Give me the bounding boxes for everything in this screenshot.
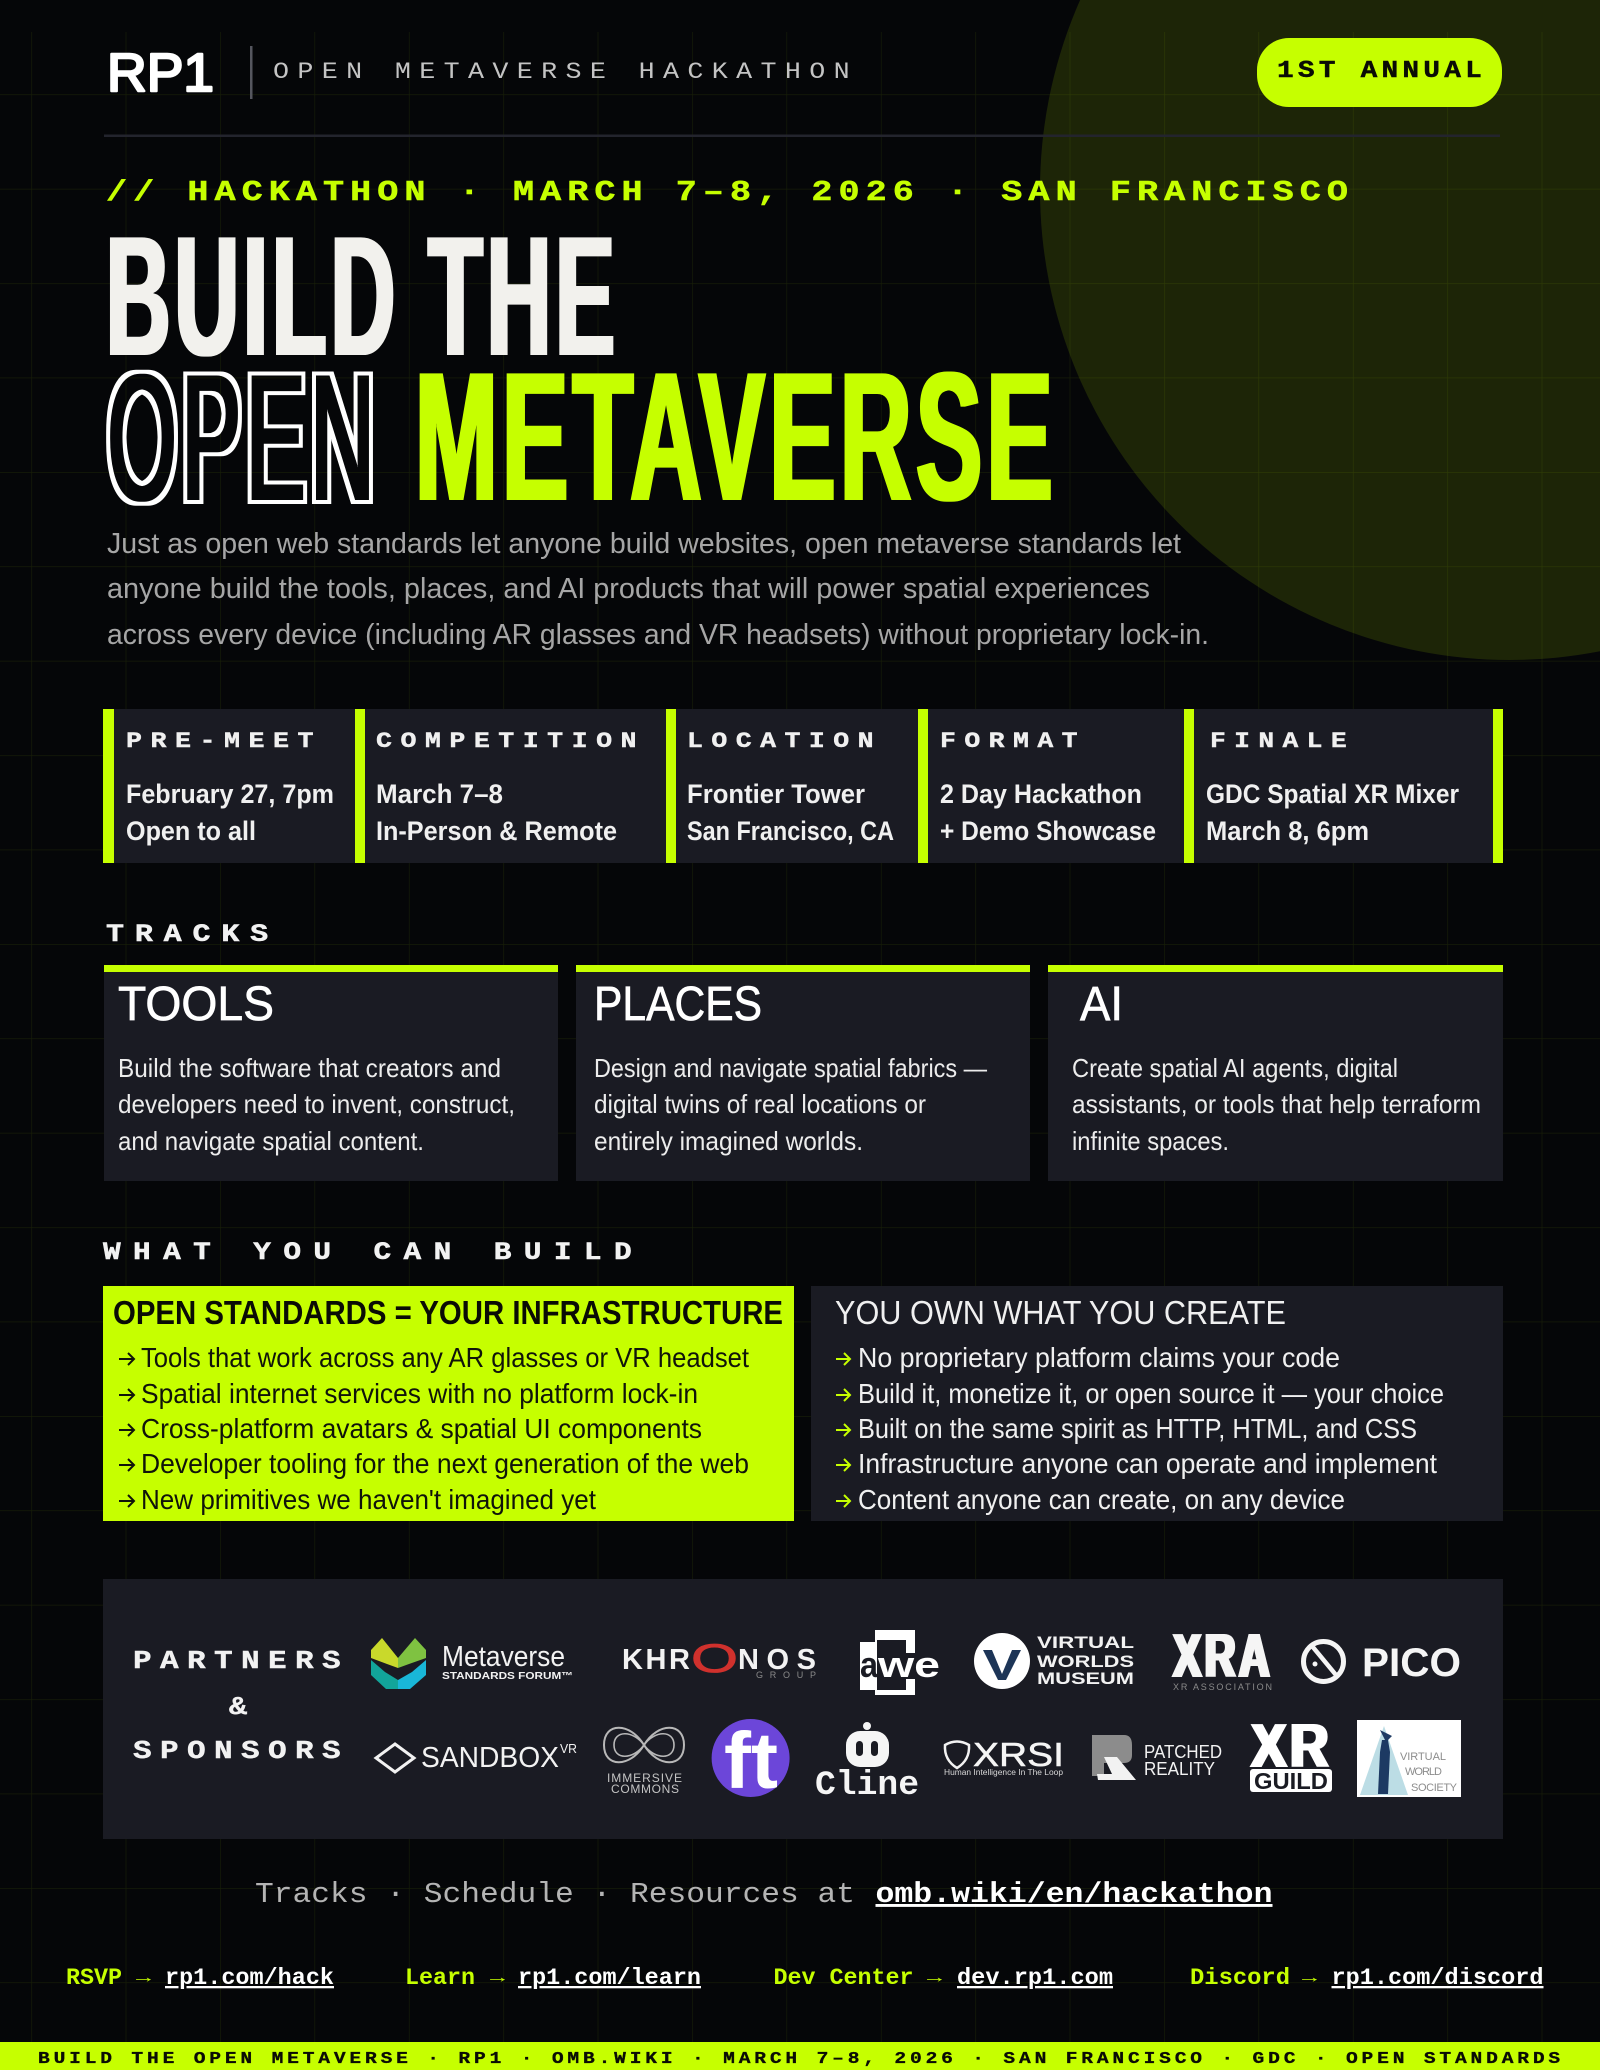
link: learn bbox=[405, 1965, 701, 1991]
resources line bbox=[255, 1878, 1272, 1911]
logo: metaverse standards forum bbox=[371, 1638, 573, 1689]
info: format: 2 Day Hackathon bbox=[940, 779, 1142, 809]
logo: khronos group: NOS bbox=[738, 1644, 816, 1676]
logo: sandbox vr bbox=[376, 1741, 577, 1774]
link: rsvp bbox=[66, 1965, 334, 1991]
panel: you own what you create: YOU OWN WHAT YOU CREATE bbox=[835, 1294, 1286, 1331]
panel: partners and sponsors bbox=[103, 1579, 1503, 1839]
list: Build it, monetize it, or open source it — your choice bbox=[858, 1378, 1444, 1409]
list: Content anyone can create, on any device bbox=[858, 1484, 1345, 1515]
title: METAVERSE bbox=[415, 333, 1057, 539]
partners heading: & bbox=[229, 1692, 247, 1722]
logo: awe: we bbox=[877, 1644, 940, 1685]
panel: open standards: OPEN STANDARDS = YOUR INFRASTRUCTURE bbox=[113, 1294, 783, 1331]
title: BUILD THE bbox=[106, 201, 619, 392]
logo: cline: Cline bbox=[815, 1767, 919, 1805]
intro paragraph: Just as open web standards let anyone build websites, open metaverse standards let bbox=[107, 528, 1181, 560]
track card: places: PLACES bbox=[594, 978, 762, 1031]
info: location: LOCATION bbox=[687, 729, 882, 754]
links row bbox=[66, 1965, 1544, 1991]
logo: xr association: XRA bbox=[1173, 1622, 1273, 1691]
header bbox=[104, 38, 1502, 137]
logo: xr guild: GUILD bbox=[1254, 1768, 1328, 1794]
track card: places: digital twins of real locations or bbox=[594, 1089, 926, 1119]
list bbox=[141, 1342, 749, 1515]
intro paragraph: anyone build the tools, places, and AI products that will power spatial experiences bbox=[107, 573, 1150, 605]
track card: tools: developers need to invent, construct, bbox=[118, 1089, 515, 1119]
info: finale bbox=[1206, 729, 1459, 846]
link: rsvp: rp1.com/hack bbox=[165, 1965, 334, 1991]
logo: patched reality bbox=[1092, 1735, 1222, 1780]
intro paragraph: across every device (including AR glasses and VR headsets) without proprietary lock-in. bbox=[107, 619, 1209, 651]
link: rsvp: RSVP bbox=[66, 1965, 122, 1991]
logo: patched reality: PATCHED bbox=[1144, 1742, 1222, 1762]
logo: patched reality: REALITY bbox=[1144, 1759, 1215, 1779]
track card: ai: infinite spaces. bbox=[1072, 1126, 1229, 1156]
header event name: OPEN METAVERSE HACKATHON bbox=[273, 59, 858, 85]
info: pre-meet bbox=[126, 729, 334, 846]
info: location bbox=[687, 729, 894, 846]
logo: sandbox vr: SANDBOX bbox=[421, 1742, 559, 1774]
logo: virtual world society: WORLD bbox=[1405, 1766, 1442, 1778]
track card: ai: Create spatial AI agents, digital bbox=[1072, 1053, 1398, 1083]
bottom ticker bar: BUILD THE OPEN METAVERSE · RP1 · OMB.WIKI · MARCH 7–8, 2026 · SAN FRANCISCO · GDC · OPEN STANDARDS bbox=[38, 2050, 1564, 2069]
track card: places: Design and navigate spatial fabrics — bbox=[594, 1053, 987, 1083]
track card: ai: AI bbox=[1080, 978, 1123, 1031]
arrows bbox=[836, 1353, 850, 1507]
logo: xrsi: Human Intelligence In The Loop bbox=[944, 1768, 1064, 1777]
link: discord bbox=[1190, 1965, 1544, 1991]
bottom ticker bar bbox=[0, 2042, 1600, 2070]
heading: tracks: TRACKS bbox=[106, 920, 279, 949]
track card: ai bbox=[1048, 965, 1503, 1181]
badge: 1st annual: 1ST ANNUAL bbox=[1277, 58, 1486, 85]
logo: khronos group: GROUP bbox=[756, 1670, 816, 1680]
logo: virtual worlds museum: VIRTUAL bbox=[1037, 1633, 1134, 1652]
info: competition bbox=[376, 729, 645, 846]
partners heading: PARTNERS bbox=[133, 1646, 349, 1676]
logo: virtual worlds museum: MUSEUM bbox=[1037, 1669, 1134, 1688]
heading: what you can build: WHAT YOU CAN BUILD bbox=[103, 1238, 644, 1267]
logo: metaverse standards forum: STANDARDS FORUM™ bbox=[442, 1671, 573, 1682]
link: dev center bbox=[774, 1965, 1113, 1991]
list: Developer tooling for the next generation of the web bbox=[141, 1448, 749, 1479]
info: pre-meet: February 27, 7pm bbox=[126, 779, 334, 809]
title bbox=[106, 201, 1057, 539]
logo: awe: a bbox=[860, 1644, 879, 1685]
info: finale: GDC Spatial XR Mixer bbox=[1206, 779, 1459, 809]
list: Tools that work across any AR glasses or VR headset bbox=[141, 1342, 749, 1373]
info: format: FORMAT bbox=[940, 729, 1086, 754]
logo: virtual world society: SOCIETY bbox=[1411, 1782, 1458, 1794]
badge: 1st annual bbox=[1257, 38, 1502, 107]
list: New primitives we haven't imagined yet bbox=[141, 1484, 596, 1515]
track card: ai: assistants, or tools that help terraform bbox=[1072, 1089, 1481, 1119]
info: location: San Francisco, CA bbox=[687, 816, 894, 846]
logo: cline bbox=[815, 1722, 919, 1805]
info: format bbox=[940, 729, 1156, 846]
decorative lime circle bbox=[1040, 0, 1600, 660]
logo: immersive commons: IMMERSIVE bbox=[607, 1771, 682, 1785]
logo: virtual world society bbox=[1357, 1720, 1461, 1797]
track card: places: entirely imagined worlds. bbox=[594, 1126, 863, 1156]
logo: xrsi bbox=[944, 1736, 1064, 1777]
logo: immersive commons bbox=[604, 1728, 684, 1796]
info: finale: FINALE bbox=[1210, 729, 1355, 754]
arrows bbox=[119, 1353, 134, 1507]
logo: khronos group: O bbox=[691, 1637, 738, 1681]
resources line: omb.wiki/en/hackathon bbox=[876, 1878, 1272, 1911]
info: location: Frontier Tower bbox=[687, 779, 865, 809]
partners heading: SPONSORS bbox=[133, 1736, 349, 1766]
logo: awe bbox=[860, 1630, 940, 1695]
link: dev center: Dev Center bbox=[774, 1965, 914, 1991]
panel: you own what you create bbox=[811, 1286, 1503, 1521]
link: learn: → bbox=[490, 1970, 505, 1987]
logo: ft bbox=[712, 1716, 790, 1805]
info: competition: March 7–8 bbox=[376, 779, 503, 809]
panel: open standards bbox=[103, 1286, 794, 1521]
link: dev center: → bbox=[927, 1970, 942, 1987]
link: discord: → bbox=[1302, 1970, 1317, 1987]
logo: virtual world society: VIRTUAL bbox=[1400, 1751, 1446, 1763]
info: format: + Demo Showcase bbox=[940, 816, 1156, 846]
info: pre-meet: PRE-MEET bbox=[126, 729, 322, 754]
list: Spatial internet services with no platform lock-in bbox=[141, 1378, 698, 1409]
logo: pico: PICO bbox=[1362, 1641, 1461, 1685]
list: Infrastructure anyone can operate and implement bbox=[858, 1448, 1437, 1479]
list: Built on the same spirit as HTTP, HTML, and CSS bbox=[858, 1413, 1417, 1444]
track card: tools: and navigate spatial content. bbox=[118, 1126, 424, 1156]
list: Cross-platform avatars & spatial UI components bbox=[141, 1413, 702, 1444]
link: dev center: dev.rp1.com bbox=[957, 1965, 1113, 1991]
logo: xrsi: XRSI bbox=[973, 1736, 1064, 1773]
track card: places bbox=[576, 965, 1030, 1181]
link: learn: Learn bbox=[405, 1965, 475, 1991]
partners heading bbox=[133, 1646, 349, 1766]
link: discord: Discord bbox=[1190, 1965, 1290, 1991]
logo: sandbox vr: VR bbox=[560, 1741, 577, 1756]
logo: xr association: XR ASSOCIATION bbox=[1173, 1682, 1272, 1692]
link: rsvp: → bbox=[136, 1970, 151, 1987]
info bar bbox=[103, 709, 1503, 863]
resources line: Tracks · Schedule · Resources at bbox=[255, 1878, 855, 1911]
list bbox=[858, 1342, 1444, 1515]
logo: khronos group: KHR bbox=[622, 1644, 690, 1676]
list: No proprietary platform claims your code bbox=[858, 1342, 1340, 1373]
logo: metaverse standards forum: Metaverse bbox=[442, 1641, 565, 1673]
track card: tools bbox=[104, 965, 558, 1181]
logo: xr guild: XR bbox=[1251, 1712, 1332, 1781]
date and location line: // HACKATHON · MARCH 7–8, 2026 · SAN FRANCISCO bbox=[106, 176, 1354, 209]
logo: khronos group bbox=[622, 1637, 816, 1681]
track card: tools: Build the software that creators and bbox=[118, 1053, 501, 1083]
link: learn: rp1.com/learn bbox=[518, 1965, 701, 1991]
track card: tools: TOOLS bbox=[118, 978, 274, 1031]
info: competition: In-Person & Remote bbox=[376, 816, 617, 846]
logo: immersive commons: COMMONS bbox=[611, 1782, 679, 1796]
link: discord: rp1.com/discord bbox=[1332, 1965, 1544, 1991]
logo: pico bbox=[1304, 1641, 1461, 1685]
intro paragraph bbox=[107, 528, 1209, 651]
logo: ft: ft bbox=[724, 1716, 778, 1805]
title: OPEN bbox=[108, 338, 380, 537]
logo: RP1: RP1 bbox=[107, 43, 214, 103]
logo: virtual worlds museum bbox=[974, 1633, 1134, 1689]
info: competition: COMPETITION bbox=[376, 729, 645, 754]
info: finale: March 8, 6pm bbox=[1206, 816, 1369, 846]
info: pre-meet: Open to all bbox=[126, 816, 256, 846]
logo: virtual worlds museum: WORLDS bbox=[1037, 1652, 1134, 1671]
logo: xr association bbox=[1173, 1622, 1273, 1692]
